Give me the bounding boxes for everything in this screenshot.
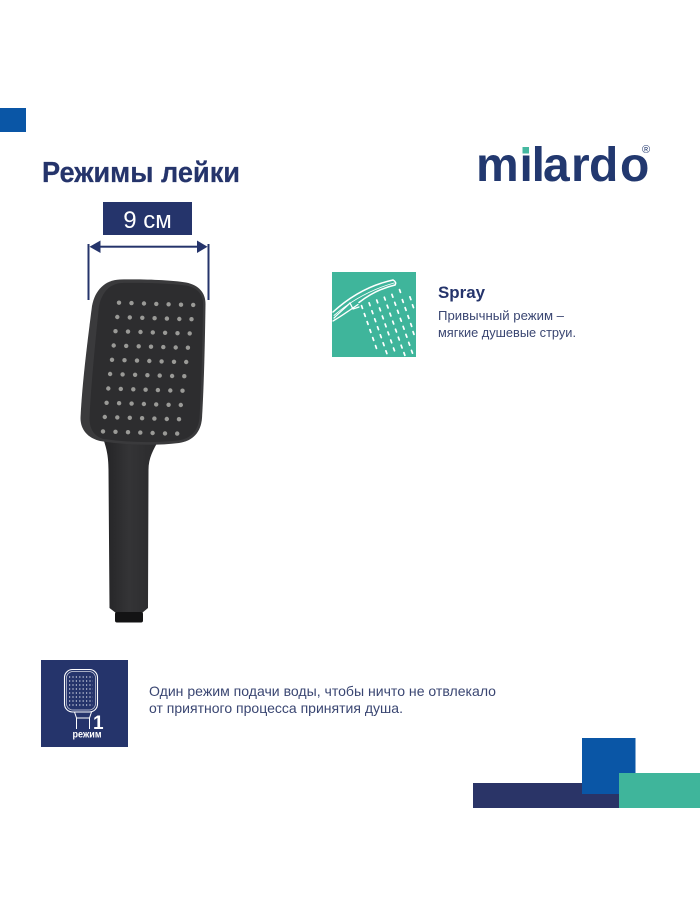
connector thread bbox=[115, 612, 143, 622]
spray description: Привычный режим – bbox=[438, 308, 565, 323]
water drops bbox=[360, 289, 415, 356]
mode description bbox=[149, 683, 496, 716]
icon: head outline bbox=[64, 670, 98, 729]
dimension label: 9 см: 9 см bbox=[123, 207, 172, 234]
spray description bbox=[438, 308, 576, 340]
mode count: 1 bbox=[93, 713, 104, 734]
dimension label: 9 см bbox=[103, 202, 192, 235]
head face bbox=[90, 283, 203, 442]
logo: milardo: ® bbox=[642, 144, 650, 156]
spray icon bbox=[332, 272, 416, 357]
decorative blocks: bottom right bbox=[473, 738, 700, 808]
spray description: мягкие душевые струи. bbox=[438, 325, 576, 340]
title: Режимы лейки bbox=[42, 157, 240, 189]
dimension arrow bbox=[88, 240, 210, 300]
icon: nozzle dots bbox=[69, 677, 93, 705]
spray heading: Spray bbox=[438, 283, 486, 302]
head body bbox=[80, 279, 206, 445]
shower head outline bbox=[333, 280, 396, 321]
handle bbox=[103, 438, 160, 613]
mode description: Один режим подачи воды, чтобы ничто не отвлекало bbox=[149, 683, 496, 699]
logo: milardo: milardo bbox=[476, 139, 649, 192]
decorative square: top left bbox=[0, 108, 26, 132]
mode icon panel bbox=[41, 660, 128, 747]
nozzles bbox=[101, 300, 195, 436]
mode description: от приятного процесса принятия душа. bbox=[149, 700, 403, 716]
shower head product bbox=[80, 279, 206, 622]
mode label: режим bbox=[72, 730, 102, 740]
